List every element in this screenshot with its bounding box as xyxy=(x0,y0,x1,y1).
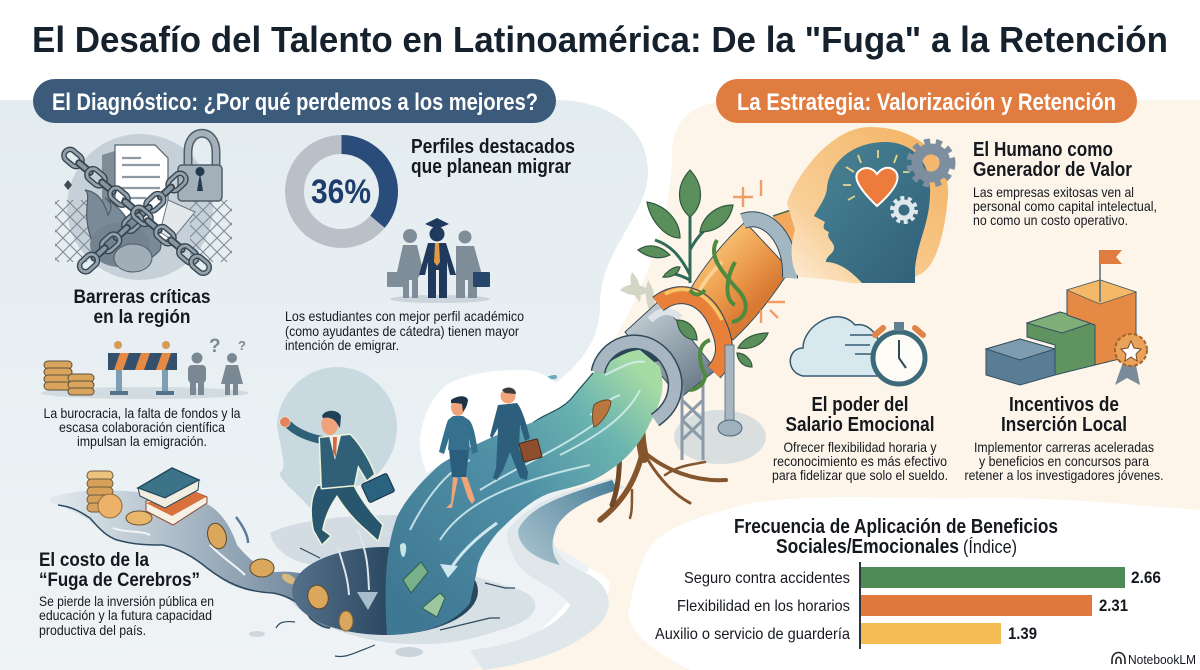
chart title: Frecuencia de Aplicación de Beneficios xyxy=(734,516,1058,538)
text: estudiantes: (como ayudantes de cátedra) tienen mayor xyxy=(285,323,519,339)
chart title: Sociales/Emocionales xyxy=(776,536,959,558)
illustration: plant and vines on pipe xyxy=(638,170,768,390)
heading: El poder del Salario Emocional: Salario Emocional xyxy=(786,414,934,436)
illustration: pipe body xyxy=(600,200,815,398)
icon: head with heart and gears xyxy=(787,127,952,283)
icon: chains and lock barriers xyxy=(55,133,232,280)
heading: Barreras críticas: en la región xyxy=(94,307,190,328)
text: empresas exitosas: personal como capital intelectual, xyxy=(973,198,1157,214)
icon: coins, roadblock and people xyxy=(41,336,249,399)
illustration: sparks xyxy=(733,180,785,323)
bar values: 1.39 xyxy=(1008,624,1037,643)
heading: El costo de la Fuga: El costo de la xyxy=(39,550,149,571)
illustration: pipe mouth rim xyxy=(598,342,675,420)
heading pill: La Estrategia: La Estrategia: Valorización y Retención xyxy=(737,89,1116,116)
heading: Incentivos: Inserción Local xyxy=(1001,414,1127,436)
icon: cloud and stopwatch xyxy=(790,317,925,384)
background panel: diagnosis xyxy=(0,100,648,670)
bar values: 2.66 xyxy=(1131,568,1161,587)
bar chart: benefits xyxy=(655,516,1161,649)
icon: coins, roadblock and people: ? xyxy=(209,336,221,357)
title: El Desafío del Talento en Latinoamérica: De la "Fuga" a la Retención xyxy=(32,19,1168,60)
illustration: pipe supports xyxy=(674,345,766,464)
icon: graduate with colleagues xyxy=(387,218,490,303)
text: flexibilidad horaria: Ofrecer flexibilidad horaria y xyxy=(784,439,936,455)
text: empresas exitosas: Las empresas exitosas ven al xyxy=(973,184,1134,200)
background panel: strategy xyxy=(470,100,1200,670)
text: carreras aceleradas: y beneficios en concursos para xyxy=(979,453,1149,469)
illustration: faded background plant xyxy=(620,272,655,316)
donut chart: 36% xyxy=(294,144,388,238)
icon: coins, roadblock and people: ? xyxy=(238,338,246,353)
text: estudiantes: intención de emigrar. xyxy=(285,337,399,353)
heading pill: La Estrategia xyxy=(716,79,1137,123)
text: empresas exitosas: no como un costo operativo. xyxy=(973,212,1128,228)
bar values: 2.31 xyxy=(1099,596,1128,615)
illustration: sinkhole xyxy=(276,530,515,657)
text: inversión pública: Se pierde la inversión pública en xyxy=(39,593,214,609)
illustration: pale pools around sinkhole xyxy=(249,515,535,657)
text: inversión pública: productiva del país. xyxy=(39,622,146,638)
text: carreras aceleradas: Implementor carreras aceleradas xyxy=(974,439,1154,455)
illustration: walking professionals xyxy=(439,387,542,508)
heading: Incentivos: Incentivos de xyxy=(1009,394,1119,416)
text: burocracia: escasa colaboración científica xyxy=(59,419,225,435)
chart title: (Índice) xyxy=(963,537,1017,557)
bar labels: Auxilio o servicio de guardería xyxy=(655,626,850,643)
text: inversión pública: educación y la futura capacidad xyxy=(39,607,212,623)
heading pill: El Diagnóstico: El Diagnóstico: ¿Por qué perdemos a los mejores? xyxy=(52,89,538,116)
heading: El costo de la Fuga: “Fuga de Cerebros” xyxy=(39,570,200,591)
heading: El Humano: Generador de Valor xyxy=(973,159,1132,181)
illustration: waterfall stream from pipe xyxy=(386,350,663,635)
illustration: stream arm under the waterfall xyxy=(470,478,625,670)
logo: NotebookLM: NotebookLM xyxy=(1128,652,1196,667)
background panel: chart area xyxy=(628,497,1200,670)
illustration: leak of coins and books xyxy=(50,468,338,628)
bars xyxy=(859,562,1125,649)
illustration: white glow behind walkers xyxy=(420,370,570,473)
text: burocracia: impulsan la emigración. xyxy=(77,433,207,449)
illustration: jumping man xyxy=(277,367,397,544)
text: estudiantes: Los estudiantes con mejor perfil académico xyxy=(285,308,524,324)
heading: El Humano: El Humano como xyxy=(973,139,1113,161)
heading: El poder del Salario Emocional: El poder del xyxy=(812,394,908,416)
text: burocracia: La burocracia, la falta de fondos y la xyxy=(44,405,241,421)
heading pill: El Diagnóstico xyxy=(33,79,556,123)
heading: Perfiles destacados: Perfiles destacados xyxy=(411,136,575,158)
icon: steps with flag and medal xyxy=(986,250,1147,385)
donut chart: 36%: 36% xyxy=(311,173,371,211)
heading: Barreras críticas: Barreras críticas xyxy=(74,287,210,308)
bar labels: Seguro contra accidentes xyxy=(684,570,850,587)
text: carreras aceleradas: retener a los investigadores jóvenes. xyxy=(964,467,1164,483)
bar labels: Flexibilidad en los horarios xyxy=(677,598,850,615)
illustration: roots xyxy=(600,415,726,520)
heading: Perfiles destacados: que planean migrar xyxy=(411,156,571,178)
text: flexibilidad horaria: para fidelizar que solo el sueldo. xyxy=(772,467,948,483)
text: flexibilidad horaria: reconocimiento es más efectivo xyxy=(773,453,947,469)
